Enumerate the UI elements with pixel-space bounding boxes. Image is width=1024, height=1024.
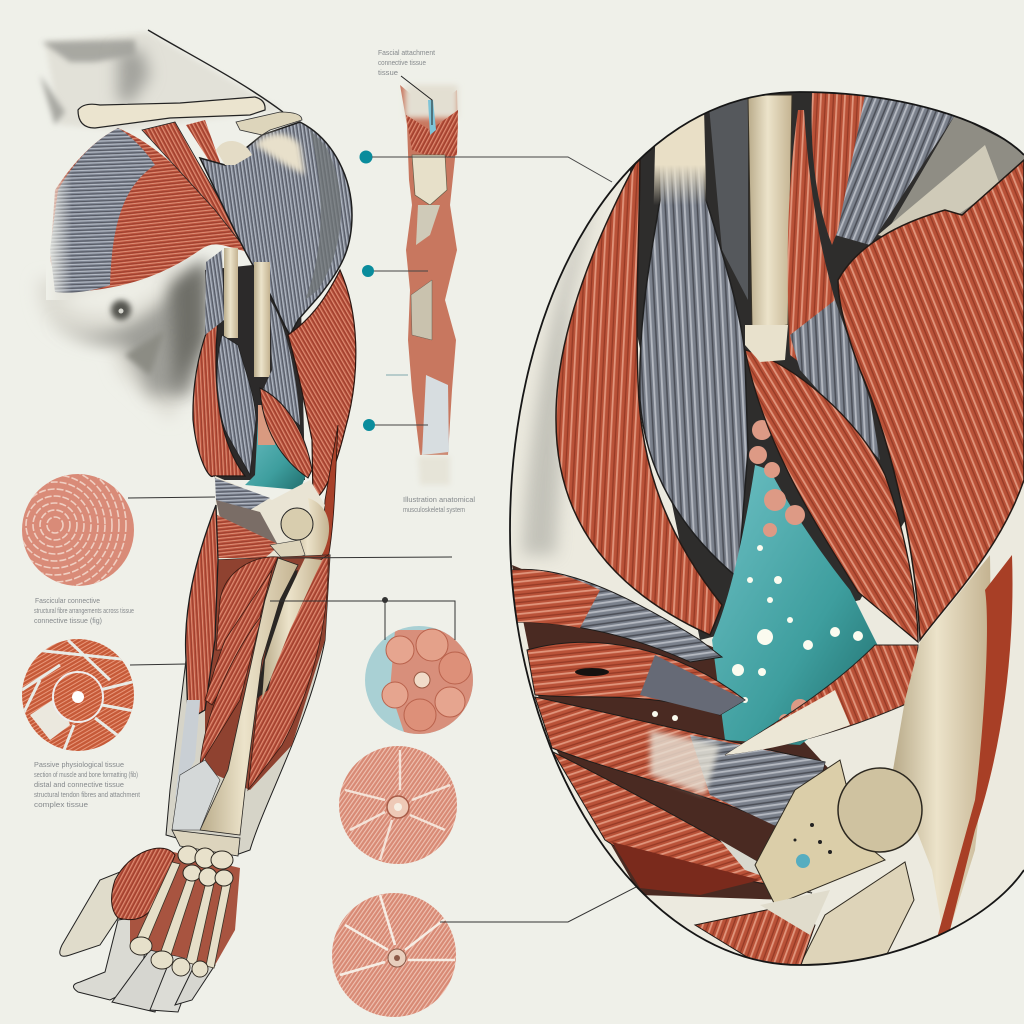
text: caption one: connective tissue (fig) — [34, 616, 102, 625]
far right red strip — [935, 555, 1013, 950]
magnified view: elbow muscles — [505, 85, 1024, 970]
connector: middle marker — [374, 270, 428, 272]
text: limb label top: Fascial attachment — [378, 48, 436, 57]
central oblique red band — [745, 350, 918, 642]
text: caption two: distal and connective tissue — [34, 780, 124, 789]
connector: cluster bracket — [270, 601, 455, 640]
upper arm muscles and shoulder — [46, 97, 356, 560]
acromion — [236, 112, 302, 135]
gray muscle arm — [217, 335, 256, 475]
elbow joint — [215, 476, 329, 562]
text: caption two: section of muscle and bone formatting (fib) — [34, 770, 138, 779]
blue foramen — [796, 854, 810, 868]
big right red muscle — [838, 160, 1024, 640]
lower left band two — [527, 642, 745, 715]
upper tendon fan — [725, 645, 918, 755]
biceps left red — [193, 300, 245, 477]
connector: circle one — [128, 497, 215, 498]
text: limb label bottom: Illustration anatomical — [403, 495, 475, 504]
marker: teal dot upper — [360, 150, 372, 164]
text: caption two: Passive physiological tissue — [34, 760, 124, 769]
marker: teal dot middle — [362, 265, 374, 277]
marker: teal dot lower — [363, 419, 375, 431]
humerus bones — [224, 248, 238, 338]
text: caption two: complex tissue — [34, 800, 88, 809]
teal synovial area — [245, 420, 308, 490]
right cream bone — [893, 555, 990, 945]
text: caption one — [34, 596, 134, 625]
text: caption one: structural fibre arrangements across tissue — [34, 606, 134, 615]
text: limb label top: connective tissue — [378, 58, 426, 67]
small dots on bone — [794, 823, 832, 854]
connector: upper marker to magnified view — [372, 157, 612, 182]
humerus bone magnified — [748, 95, 792, 330]
red strip top — [812, 92, 865, 245]
text: caption one: Fascicular connective — [35, 596, 100, 605]
wrist bones — [172, 830, 240, 856]
dark backdrop — [630, 92, 1024, 640]
magnified outline — [510, 92, 1024, 965]
knuckles — [130, 937, 208, 977]
concentric core — [53, 672, 103, 722]
circle: fingerprint tissue detail — [22, 474, 134, 586]
text: limb label top: tissue — [378, 68, 398, 77]
text: limb label top — [378, 48, 436, 77]
icon: nipple — [111, 300, 131, 320]
connector: section four to magnified view — [440, 885, 640, 922]
radius bone — [200, 558, 298, 835]
joint bones — [755, 760, 885, 905]
pink nodules — [749, 420, 809, 726]
icon: bracket dot — [382, 597, 388, 603]
carpal bones — [178, 846, 233, 886]
teal synovial region — [712, 465, 880, 745]
connector: circle two — [130, 664, 186, 665]
lower left band one — [512, 569, 722, 662]
text: limb label bottom: musculoskeletal system — [403, 505, 465, 514]
ulna bone — [262, 558, 322, 700]
hand — [60, 846, 240, 1012]
brachioradialis — [186, 505, 218, 720]
circle: muscle section four — [332, 893, 456, 1017]
bottom red muscle — [694, 909, 816, 964]
fingers — [60, 870, 125, 956]
lower left band three — [534, 696, 826, 815]
thenar muscle — [112, 848, 175, 920]
circle: muscle section three — [339, 746, 457, 864]
mini limb figure — [400, 85, 458, 485]
connector: small teal tick — [386, 374, 408, 376]
torso: stippled neck and chest — [38, 30, 283, 420]
shoulder red straps — [142, 122, 248, 252]
lower left band four — [553, 752, 812, 893]
oblique band — [260, 388, 312, 478]
gray upper right muscles — [835, 92, 955, 245]
triceps right red — [288, 270, 356, 500]
deltoid — [200, 122, 352, 335]
connector: limb label — [401, 76, 432, 125]
pectoral muscle fan — [46, 128, 248, 300]
connector: lower marker — [375, 424, 428, 426]
forearm — [166, 505, 330, 856]
white dots — [652, 545, 863, 721]
forearm flexor muscles — [216, 557, 278, 650]
left red muscle — [556, 155, 722, 635]
lower dark backdrop — [512, 565, 830, 900]
text: limb label bottom — [403, 495, 475, 514]
red strip — [322, 425, 338, 560]
text: caption two: structural tendon fibres and attachment — [34, 790, 141, 799]
central gray muscle — [640, 108, 748, 578]
connector: elbow line — [280, 557, 452, 558]
circle: cell cluster — [365, 626, 480, 735]
text: caption two — [34, 760, 141, 809]
metacarpal bones — [136, 862, 232, 968]
palm backdrop — [130, 850, 240, 965]
extensor muscles — [248, 555, 328, 790]
circle: cross section with white core — [22, 639, 134, 751]
lower bone — [800, 862, 914, 968]
clavicle — [78, 97, 265, 128]
